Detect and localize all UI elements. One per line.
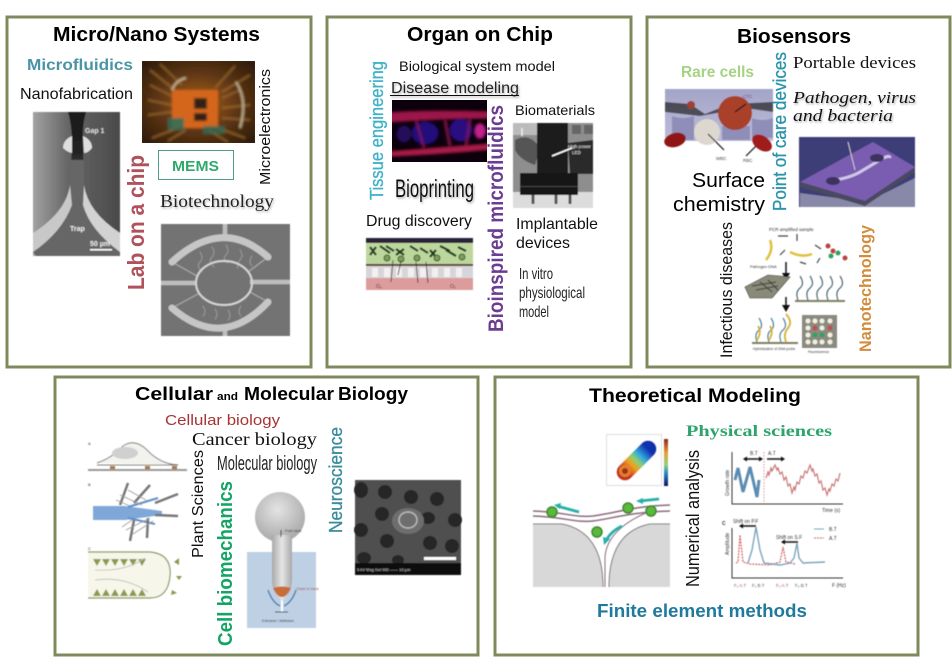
label: Pathogen, virus and bacteria	[792, 88, 916, 125]
image: implantable LED device: High power	[568, 144, 591, 149]
label: Finite element methods: Finite element methods	[597, 601, 807, 621]
title: Biosensors: Biosensors	[737, 26, 851, 48]
chart: growth rate over time: Time (s)	[822, 508, 840, 514]
label: Biotechnology: Biotechnology	[160, 191, 274, 211]
label: Cellular biology: Cellular biology	[165, 412, 281, 429]
label: Drug discovery: Drug discovery	[366, 213, 472, 230]
chart: amplitude spectrum	[722, 519, 846, 589]
diagram B: axon growth cone: B	[88, 482, 91, 487]
chart: amplitude spectrum: F₂ A.T	[776, 583, 789, 588]
label: Nanofabrication: Nanofabrication	[20, 86, 133, 103]
label: MEMS box	[158, 150, 234, 180]
label: Implantable devices: Implantable	[516, 216, 598, 233]
chart: growth rate over time: Growth rate	[725, 470, 731, 496]
image: circulating tumour cell capture: WBC	[716, 156, 727, 161]
label: Tissue engineering: Tissue engineering	[367, 61, 387, 200]
diagram: cell on pillar: Extrusion / Adhesion	[262, 619, 294, 623]
title: Cellular and Molecular Biology: and	[217, 391, 238, 403]
label: Surface chemistry: chemistry	[673, 194, 765, 216]
label: Portable devices: Portable devices	[793, 53, 916, 72]
label: Molecular biology: Molecular biology	[217, 453, 317, 475]
diagram: PCR microarray workflow: Fluorescence	[808, 350, 829, 354]
label: MEMS box: MEMS	[172, 158, 219, 175]
image: circulating tumour cell capture: CTC	[743, 94, 753, 99]
label: Microelectronics: Microelectronics	[257, 69, 274, 185]
label: Surface chemistry: Surface	[692, 170, 765, 192]
image: implantable LED device: LED	[572, 150, 582, 155]
diagram B: axon growth cone	[88, 482, 178, 541]
chart: amplitude spectrum: B.T	[829, 527, 837, 533]
image: SEM ring sensor	[161, 224, 290, 336]
panel: Micro/Nano Systems	[7, 17, 311, 367]
diagram: cell on pillar	[247, 492, 319, 628]
image: SEM trap device: Trap	[70, 226, 85, 233]
label: In vitro physiological model	[519, 266, 585, 321]
chart: growth rate over time: A.T	[768, 451, 776, 457]
diagram C: root tip: C	[88, 546, 91, 551]
panel: Organ on Chip	[327, 17, 631, 367]
diagram: tissue barrier chip	[366, 238, 473, 290]
chart: growth rate over time	[725, 451, 843, 514]
image: circulating tumour cell capture	[663, 89, 775, 163]
title: Cellular and Molecular Biology: Molecular	[244, 384, 334, 404]
diagram: PCR microarray workflow: PCR amplified sample	[769, 227, 814, 232]
label: Infectious diseases: Infectious diseases	[717, 222, 736, 358]
label: Implantable devices: devices	[516, 235, 570, 252]
title: Organ on Chip: Organ on Chip	[407, 24, 553, 46]
panel: Cellular and Molecular Biology	[55, 377, 478, 655]
chart: heat map cylinder	[606, 434, 668, 486]
chart: amplitude spectrum: Shift on S.F	[776, 535, 802, 541]
label: Neuroscience: Neuroscience	[326, 427, 346, 533]
chart: amplitude spectrum: F₁ A.T	[734, 583, 747, 588]
chart: amplitude spectrum: Amplitude	[725, 533, 731, 555]
diagram: tissue barrier chip: O₂	[450, 284, 456, 290]
label: Numerical analysis: Numerical analysis	[683, 450, 703, 587]
chart: amplitude spectrum: F (Hz)	[832, 583, 846, 589]
image: SEM cell on perforated membrane: 5 kV Mag Det WD —— 10 µm	[357, 567, 411, 572]
image: SEM trap device: 50 µm	[90, 241, 110, 248]
diagram: particle trap channel	[533, 498, 670, 587]
panel: Theoretical Modeling	[495, 377, 918, 655]
chart: amplitude spectrum: F₁ B.T	[752, 583, 765, 588]
label: Bioprinting: Bioprinting	[395, 175, 474, 203]
label: Pathogen, virus and bacteria: Pathogen, virus	[792, 88, 916, 107]
image: SEM trap device	[33, 112, 120, 256]
image: purple microfluidic chip	[799, 137, 915, 207]
label: Surface chemistry	[673, 170, 765, 216]
label: Nanotechnology: Nanotechnology	[856, 224, 875, 352]
image: SEM trap device: Gap 1	[85, 128, 105, 135]
label: Pathogen, virus and bacteria: and bacteria	[793, 106, 893, 125]
panel: Biosensors	[647, 17, 950, 367]
diagram A: adherent cell	[88, 441, 187, 470]
diagram A: adherent cell: A	[88, 441, 91, 446]
title: Cellular and Molecular Biology: Biology	[338, 384, 408, 404]
title: Micro/Nano Systems: Micro/Nano Systems	[53, 24, 260, 46]
title: Cellular and Molecular Biology	[135, 384, 408, 404]
diagram: cell on pillar: Onset of crack	[296, 587, 319, 591]
label: Microfluidics: Microfluidics	[27, 57, 133, 74]
label: In vitro physiological model: model	[519, 304, 549, 321]
title: Theoretical Modeling: Theoretical Modeling	[589, 386, 801, 407]
label: Cell biomechanics: Cell biomechanics	[215, 481, 237, 646]
chart: amplitude spectrum: C	[722, 521, 726, 527]
image: implantable LED device	[513, 123, 593, 208]
image: gold microchip photo	[140, 59, 257, 145]
label: Implantable devices	[516, 216, 598, 252]
chart: amplitude spectrum: F₂ B.T	[795, 583, 808, 588]
title: Cellular and Molecular Biology: Cellular	[135, 384, 213, 404]
label: Biological system model: Biological system model	[399, 58, 555, 74]
diagram: PCR microarray workflow	[745, 227, 848, 354]
label: Lab on a chip: Lab on a chip	[123, 155, 149, 290]
label: In vitro physiological model: physiological	[519, 285, 585, 302]
label: Point of care devices: Point of care devices	[770, 52, 790, 211]
image: fluorescent tissue	[392, 100, 487, 162]
chart: growth rate over time: B.T	[750, 451, 758, 457]
diagram: cell migration schematics A B C	[88, 441, 187, 598]
chart: amplitude spectrum: Shift on P.F	[733, 519, 758, 525]
label: Cancer biology: Cancer biology	[192, 429, 317, 449]
label: Disease modeling: Disease modeling	[391, 80, 519, 97]
label: Physical sciences: Physical sciences	[686, 423, 832, 440]
image: SEM cell on perforated membrane	[354, 480, 462, 575]
chart: amplitude spectrum: A.T	[829, 536, 837, 542]
image: circulating tumour cell capture: RBC	[743, 158, 753, 163]
label: In vitro physiological model: In vitro	[519, 266, 553, 283]
diagram C: root tip	[88, 546, 182, 598]
label: Biomaterials: Biomaterials	[515, 102, 595, 118]
label: Plant Sciences: Plant Sciences	[190, 450, 207, 558]
label: Rare cells: Rare cells	[681, 64, 754, 81]
diagram: PCR microarray workflow: Hybridization of DNA probe	[753, 347, 795, 351]
diagram: cell on pillar: Push back	[285, 529, 302, 533]
label: Bioinspired microfluidics: Bioinspired microfluidics	[485, 105, 508, 332]
diagram: PCR microarray workflow: Pathogen DNA	[750, 264, 777, 269]
diagram: tissue barrier chip: O₂	[376, 284, 382, 290]
